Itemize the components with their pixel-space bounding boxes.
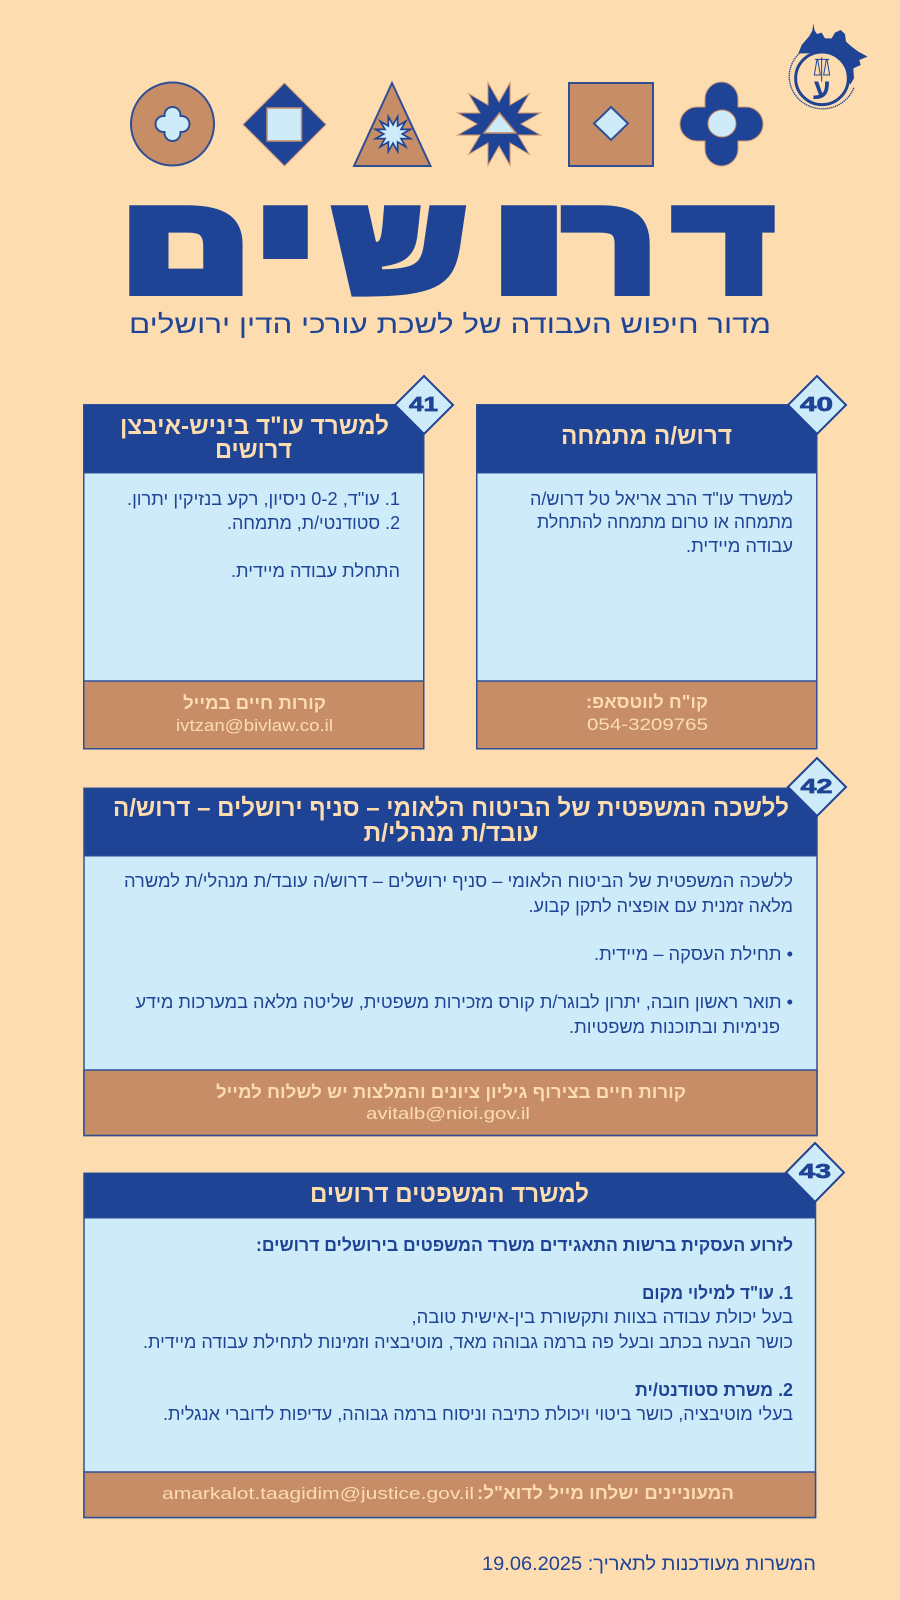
body: job 43: בעל יכולת עבודה בצוות ותקשורת בין-אישית טובה, — [412, 1307, 793, 1327]
body: job 42: • תואר ראשון חובה, יתרון לבוגר/ת קורס מזכירות משפטית, שליטה מלאה במערכות מידע — [136, 992, 793, 1012]
heading: job 40: דרוש/ה מתמחה — [561, 422, 732, 450]
body: job 41: 2. סטודנטי/ת, מתמחה. — [227, 513, 400, 533]
contact: job 42: קורות חיים בצירוף גיליון ציונים והמלצות יש לשלוח למייל — [216, 1082, 686, 1102]
badge: 40 — [788, 376, 846, 434]
body: job 43: בעלי מוטיבציה, כושר ביטוי ויכולת כתיבה וניסוח ברמה גבוהה, עדיפות לדוברי אנגלית. — [163, 1404, 793, 1424]
body: job 41 — [127, 489, 400, 581]
panel: job 40 — [476, 376, 846, 749]
header: job 42 — [84, 788, 817, 856]
logo — [789, 23, 868, 109]
panel: job 43 — [84, 1143, 844, 1518]
subtitle: מדור חיפוש העבודה של לשכת עורכי הדין ירושלים — [129, 309, 771, 339]
heading: job 42: ללשכה המשפטית של הביטוח הלאומי – סניף ירושלים – דרוש/ה — [113, 794, 789, 822]
heading: job 41: דרושים — [215, 436, 292, 464]
title: ם — [122, 172, 248, 318]
icon: star with triangle — [458, 82, 540, 166]
contact: job 40: קו"ח לווטסאפ: — [586, 692, 708, 712]
panel: job 41 — [84, 376, 453, 749]
body: job 43: כושר הבעה בכתב ובעל פה ברמה גבוהה מאד, מוטיבציה וזמינות לתחילת עבודה מיידית. — [143, 1332, 793, 1352]
title: י — [256, 172, 316, 318]
contact: job 42 — [216, 1082, 686, 1123]
body: job 41: התחלת עבודה מיידית. — [231, 561, 400, 581]
contact: job 41 — [176, 693, 333, 735]
heading: job 43: למשרד המשפטים דרושים — [310, 1180, 589, 1208]
icon: square with diamond — [569, 83, 653, 166]
badge: 41 — [395, 376, 453, 434]
logo: ע — [813, 73, 830, 105]
contact: job 40 — [586, 692, 708, 734]
contact: job 42: avitalb@nioi.gov.il — [366, 1104, 530, 1123]
footer: job 43 — [84, 1472, 816, 1518]
contact: job 41: קורות חיים במייל — [183, 693, 326, 713]
body: job 43: 2. משרת סטודנט/ית — [635, 1380, 793, 1400]
contact: job 43 — [162, 1483, 734, 1503]
body: job 42 — [124, 871, 793, 1037]
body: job 43: 1. עו"ד למילוי מקום — [642, 1283, 793, 1303]
contact: job 43: המעוניינים ישלחו מייל לדוא"ל: — [477, 1483, 734, 1503]
footer: job 41 — [84, 681, 424, 749]
heading: job 42: עובד/ת מנהלי/ת — [364, 819, 538, 847]
header: job 40 — [476, 404, 817, 473]
badge: 43 — [786, 1143, 844, 1202]
contact: job 40: 054-3209765 — [587, 715, 708, 734]
panel: job 42 — [84, 758, 846, 1136]
icon: triangle with star — [354, 83, 430, 166]
badge: 41: 41 — [409, 394, 438, 416]
heading: job 41 — [120, 412, 389, 464]
title: ו — [492, 172, 566, 318]
footer: job 42 — [84, 1070, 817, 1136]
heading: job 42 — [113, 794, 789, 847]
header: job 43 — [84, 1173, 816, 1218]
contact: job 41: ivtzan@bivlaw.co.il — [176, 716, 333, 735]
body: job 40: מתמחה או טרום מתמחה להתחלת — [537, 512, 793, 532]
badge: 43: 43 — [799, 1161, 831, 1183]
body: job 42: ללשכה המשפטית של הביטוח הלאומי – סניף ירושלים – דרוש/ה עובד/ת מנהלי/ת למשרה — [124, 871, 793, 891]
body: job 41: 1. עו"ד, 0-2 ניסיון, רקע בנזיקין יתרון. — [127, 489, 400, 509]
body: job 40 — [530, 489, 793, 556]
body: job 43: לזרוע העסקית ברשות התאגידים משרד המשפטים בירושלים דרושים: — [256, 1235, 793, 1255]
title: ש — [335, 172, 464, 318]
badge: 42: 42 — [800, 776, 832, 798]
icon: clover with circle — [680, 82, 763, 166]
body: job 42: מלאה זמנית עם אופציה לתקן קבוע. — [528, 896, 793, 916]
body: job 40: עבודה מיידית. — [686, 536, 793, 556]
icon: circle with clover — [131, 82, 214, 166]
title: ד — [676, 172, 772, 318]
body: job 43 — [143, 1235, 793, 1424]
body: job 42: פנימיות ובתוכנות משפטיות. — [569, 1017, 780, 1037]
icon: diamond with square — [243, 83, 326, 166]
contact: job 43: amarkalot.taagidim@justice.gov.il — [162, 1484, 474, 1503]
body: job 40: למשרד עו"ד הרב אריאל טל דרוש/ה — [530, 489, 793, 509]
badge: 40: 40 — [800, 394, 833, 416]
header: job 41 — [84, 404, 424, 473]
badge: 42 — [788, 758, 846, 816]
footer note: update date: המשרות מעודכנות לתאריך: 19.06.2025 — [482, 1554, 816, 1575]
heading: job 41: למשרד עו"ד ביניש-איבצן — [120, 412, 389, 440]
body: job 42: • תחילת העסקה – מיידית. — [594, 944, 793, 964]
title: ר — [565, 172, 655, 318]
footer: job 40 — [477, 681, 817, 749]
